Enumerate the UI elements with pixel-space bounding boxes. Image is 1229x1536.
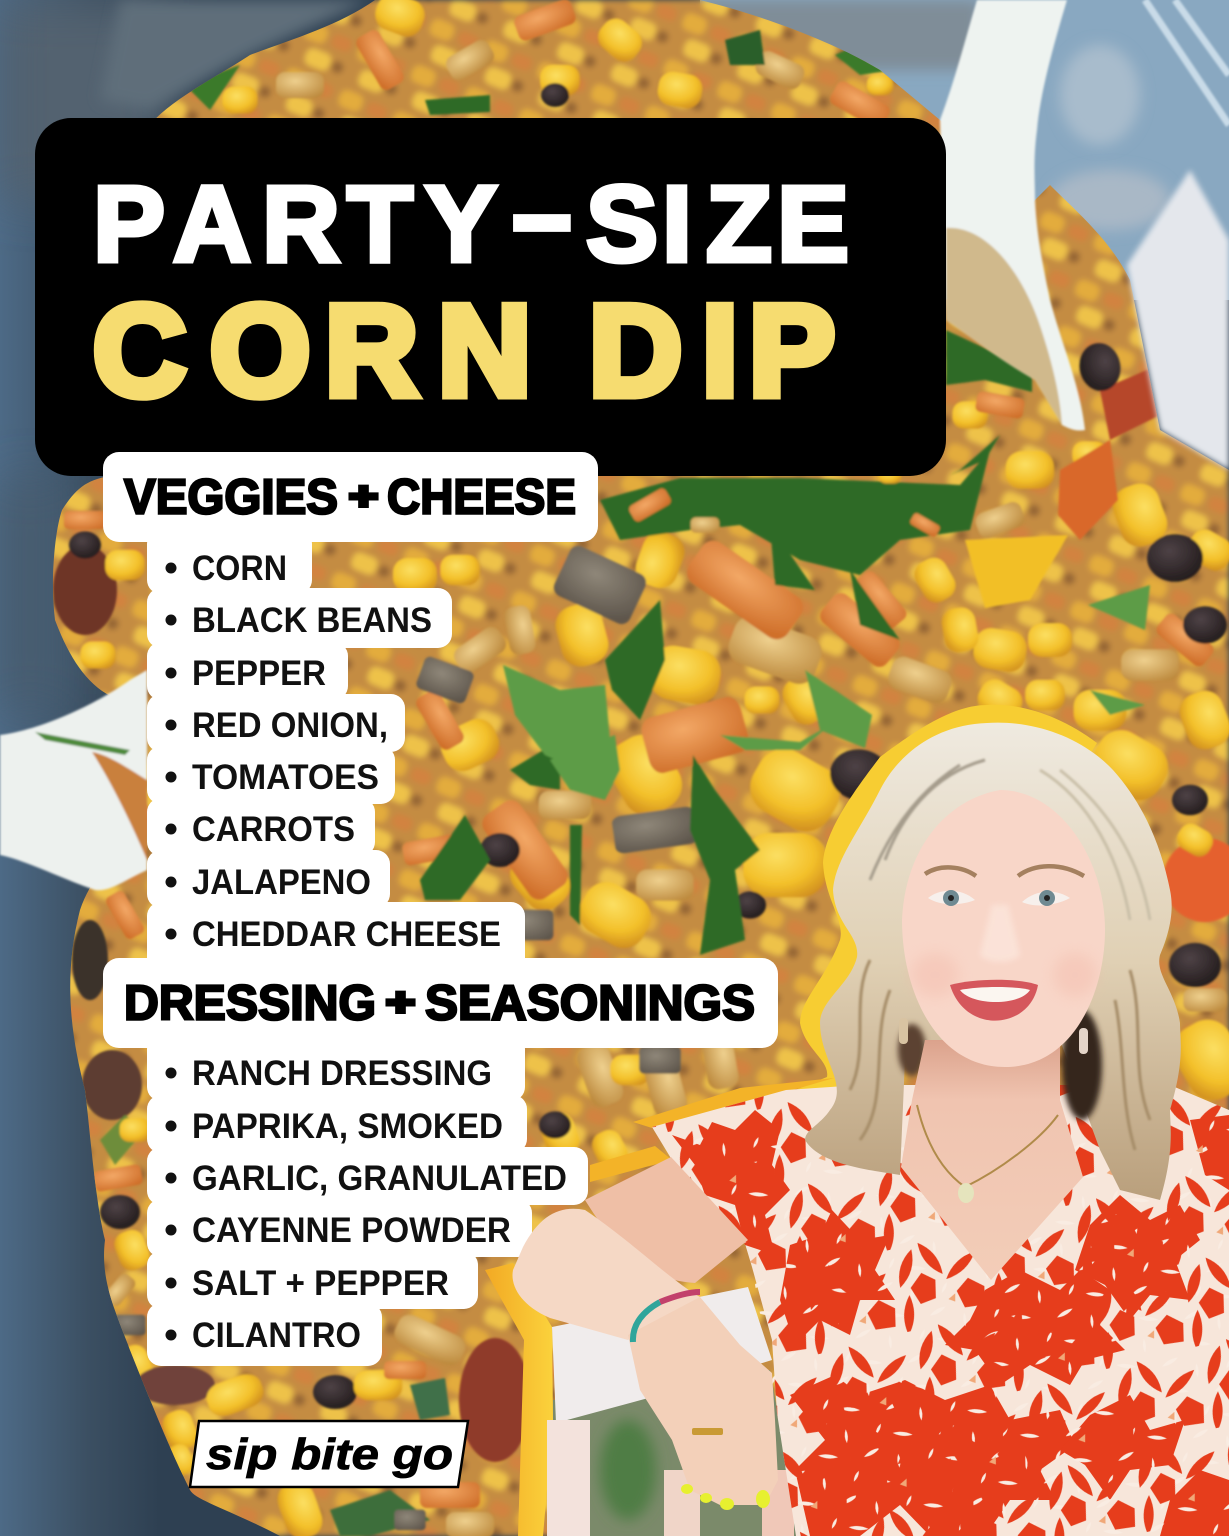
large red floral clusters (672, 1110, 1229, 1536)
cilantro leaves (420, 330, 1032, 955)
ingredient items: TOMATOES (192, 758, 379, 797)
photo: woman in red floral dress (485, 705, 1229, 1536)
panel: veggies and cheese list (103, 452, 598, 972)
heading: veggies + cheese (103, 452, 598, 542)
lower middle food (577, 1048, 623, 1104)
nose (980, 905, 1020, 962)
hair (805, 723, 1181, 1200)
white railing (547, 1287, 794, 1536)
title line: PARTY-SIZE (93, 153, 849, 284)
left food edge (53, 545, 117, 635)
upper arm (585, 1157, 748, 1283)
ingredient items: CAYENNE POWDER (192, 1211, 511, 1250)
black title panel (35, 118, 946, 476)
eyes (925, 866, 1084, 906)
logo: sip bite go: sip bite go (206, 1430, 453, 1479)
ingredient items: BLACK BEANS (192, 601, 432, 640)
ingredient items: CILANTRO (192, 1316, 361, 1355)
neck and chest (901, 1040, 1083, 1280)
corn and pieces (374, 0, 426, 37)
heading: dressing + seasonings (103, 958, 778, 1048)
heading: veggies + cheese: + (349, 476, 378, 518)
ring (692, 1428, 723, 1435)
ingredient items: RED ONION, (192, 706, 388, 745)
heading: dressing + seasonings: SEASONINGS (425, 976, 755, 1030)
ingredient items: SALT + PEPPER (192, 1264, 449, 1303)
ingredient items (166, 1054, 567, 1355)
ingredient items: PAPRIKA, SMOKED (192, 1107, 503, 1146)
face (902, 790, 1105, 1067)
panel: dressing and seasonings list (103, 958, 778, 1366)
ingredient items: GARLIC, GRANULATED (192, 1159, 567, 1198)
ingredient items: CHEDDAR CHEESE (192, 915, 501, 954)
forearm (512, 1209, 700, 1340)
mouth (950, 980, 1038, 1021)
ingredient items: RANCH DRESSING (192, 1054, 492, 1093)
list backing shape (147, 1035, 588, 1366)
yellow fingernails (681, 1484, 770, 1510)
list backing shape (147, 530, 525, 972)
dark hair shadow (898, 1010, 1102, 1120)
paper liner, upper right (1127, 170, 1229, 470)
white serving spoon, upper right (940, 0, 1085, 431)
top band leaves (425, 95, 490, 115)
title line: PARTY-SIZE: PARTY (93, 163, 497, 284)
necklace (917, 1105, 1058, 1187)
earrings (899, 1018, 908, 1044)
pendant (958, 1183, 974, 1203)
bracelet (633, 1292, 700, 1342)
ingredient items: JALAPENO (192, 863, 371, 902)
yellow cut-out outline (790, 705, 1097, 1120)
hand (628, 1297, 778, 1505)
title line: PARTY-SIZE: - (510, 153, 574, 274)
yellow strip (485, 1263, 553, 1536)
small red leaves (652, 1085, 1229, 1536)
lid, upper right (100, 0, 1229, 300)
white serving spoon, left (0, 670, 147, 890)
heading: dressing + seasonings: + (386, 982, 415, 1024)
logo: sip bite go (190, 1421, 468, 1487)
yellow edge along sleeve (590, 1078, 834, 1182)
heading: veggies + cheese: VEGGIES (124, 470, 338, 524)
title line: CORN DIP (93, 279, 835, 423)
title line: CORN DIP: DIP (589, 279, 835, 423)
title line: PARTY-SIZE: SIZE (586, 163, 849, 284)
hair strands (850, 760, 1150, 1150)
white flecks in red clusters (672, 1110, 1229, 1536)
ingredient items: CORN (192, 549, 287, 588)
ingredient items: CARROTS (192, 810, 355, 849)
ingredient items: PEPPER (192, 654, 326, 693)
ingredient items (166, 549, 501, 954)
dress (652, 1085, 1229, 1536)
heading: veggies + cheese: CHEESE (387, 470, 576, 524)
garden behind railing (553, 1370, 800, 1536)
title line: CORN DIP: CORN (93, 279, 531, 423)
heading: dressing + seasonings: DRESSING (124, 976, 376, 1030)
